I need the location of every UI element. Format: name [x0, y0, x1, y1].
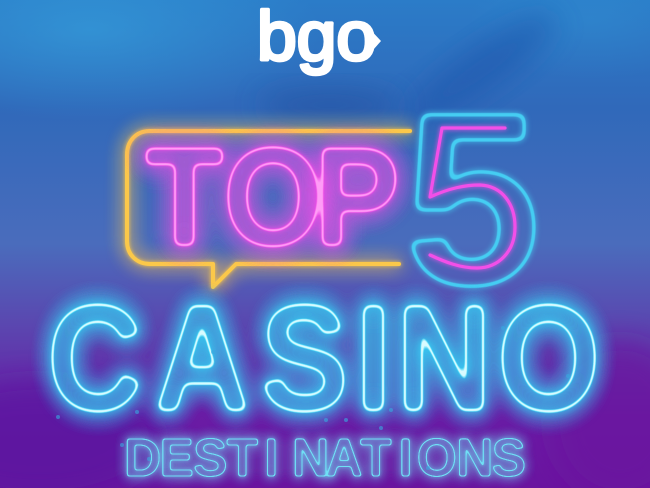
- heading: DESTINATIONS: DESTINATIONS: [124, 428, 526, 488]
- pink accent tube inside the 5: [430, 128, 515, 268]
- heading: CASINO: CASINO: [47, 274, 600, 443]
- speech bubble outline: [127, 131, 410, 287]
- heading: 5: 5: [404, 62, 541, 337]
- decorative light specks: [56, 326, 570, 470]
- heading: TOP: TOP: [145, 118, 400, 275]
